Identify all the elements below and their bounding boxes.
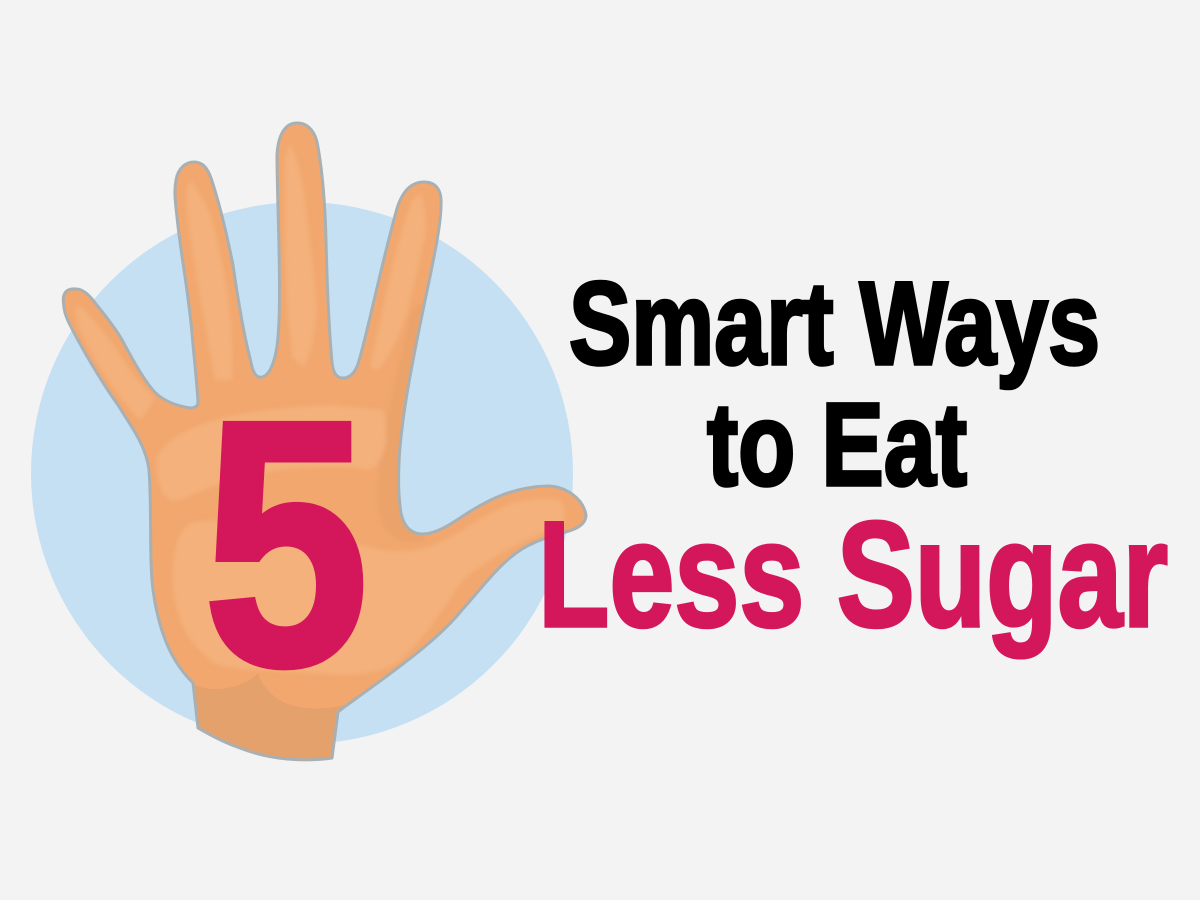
index finger highlight [370,193,426,370]
middle finger highlight [285,143,317,367]
title line 2: to Eat [707,379,967,511]
pinky highlight [75,307,154,420]
hand shading [75,143,565,770]
hand base shape [63,123,586,760]
palm highlight upper [157,405,386,501]
soft shading shapes [75,143,565,675]
side shadow near index finger [377,300,425,542]
number 5: 5 [203,348,369,738]
blue circle [31,202,573,744]
title [538,258,1168,658]
palm and thumb highlight [173,498,565,675]
hand outline [63,123,586,760]
icon: hand [63,123,586,770]
wrist shadow [195,674,344,758]
ring finger highlight [186,180,232,380]
